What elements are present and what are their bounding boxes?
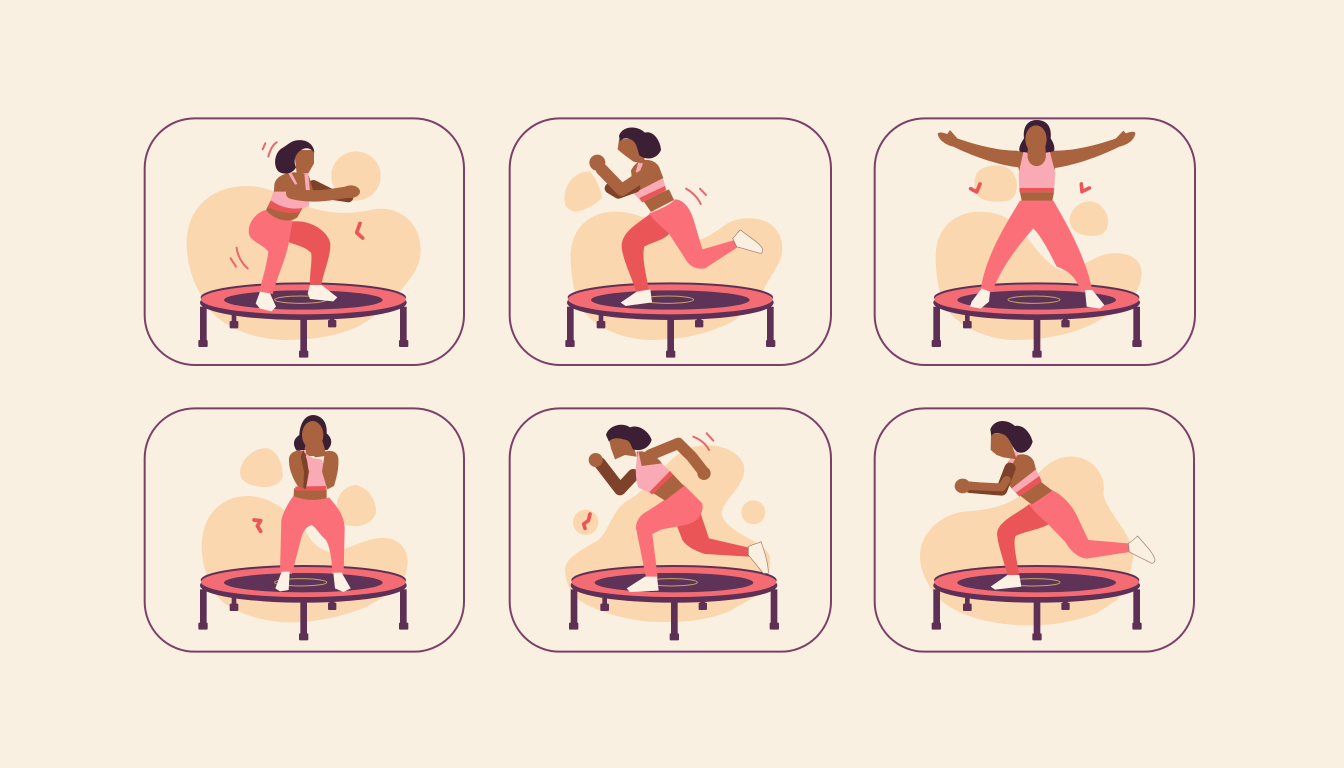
panel: deep squat with hands at chin <box>145 408 464 652</box>
trampoline <box>198 565 408 640</box>
background blobs <box>920 457 1133 625</box>
trampoline <box>932 565 1142 640</box>
figure: squatting woman with raised hands <box>254 415 351 592</box>
figure: star jump woman <box>938 120 1135 309</box>
trampoline <box>565 282 775 358</box>
figure: jogging woman <box>589 127 763 306</box>
panel frame <box>510 408 831 652</box>
trampoline <box>932 282 1142 358</box>
panel: running stride with arm swing <box>510 408 831 652</box>
panel frame <box>875 408 1194 652</box>
figure: lunging woman <box>955 421 1155 590</box>
panel: star jump with arms spread <box>875 118 1195 365</box>
trampoline <box>569 565 779 640</box>
panel: squat with arms forward <box>145 118 464 365</box>
trampoline <box>198 282 408 358</box>
panel frame <box>145 408 464 652</box>
figure: sprinting woman <box>584 425 768 592</box>
background blobs <box>202 448 408 622</box>
background blobs <box>564 172 782 340</box>
background blobs <box>565 445 770 622</box>
background blobs <box>936 165 1142 340</box>
panel frame <box>510 118 831 365</box>
figure: squatting woman <box>231 140 363 311</box>
panel frame <box>145 118 464 365</box>
panel: lunge with rear leg extended <box>875 408 1194 652</box>
panel frame <box>875 118 1195 365</box>
background blobs <box>187 151 421 340</box>
panel: high-knee jog facing left <box>510 118 831 365</box>
